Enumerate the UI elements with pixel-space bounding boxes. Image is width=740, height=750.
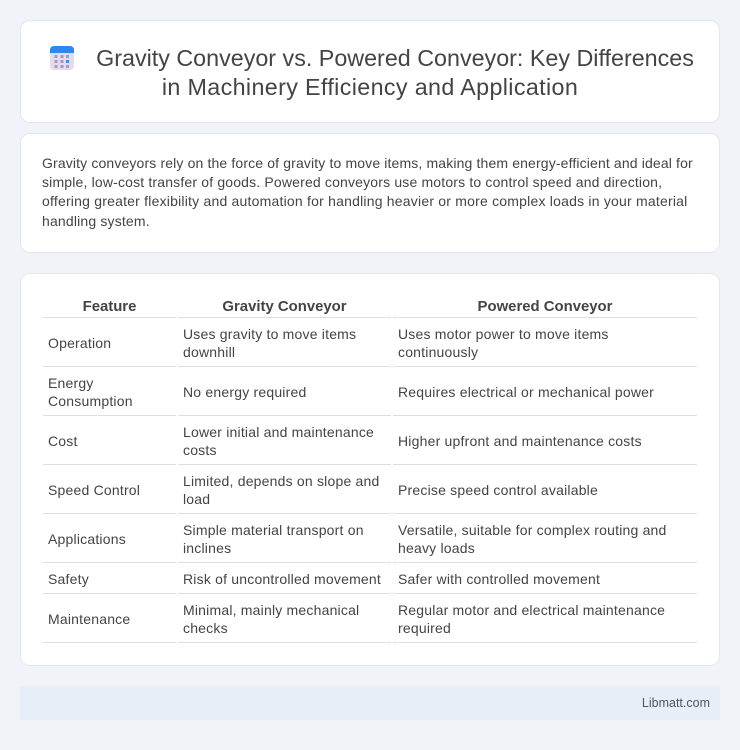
table rows: No energy required [183, 384, 306, 400]
panel: title card [20, 20, 720, 123]
table header: Feature [83, 299, 136, 315]
table rows: Applications [48, 531, 126, 547]
intro text: simple, low-cost transfer of goods. Powered conveyors use motors to control speed and direction, [42, 174, 662, 190]
table rows: Safety [48, 571, 89, 587]
table rows: Lower initial and maintenance [183, 424, 374, 440]
table rows: Minimal, mainly mechanical [183, 602, 359, 618]
table rows: Versatile, suitable for complex routing and [398, 522, 667, 538]
table rows: downhill [183, 344, 235, 360]
table header: Powered Conveyor [478, 299, 612, 315]
title: in Machinery Efficiency and Application [162, 74, 578, 100]
footer [20, 686, 720, 720]
table rows: Cost [48, 433, 78, 449]
intro text: Gravity conveyors rely on the force of gravity to move items, making them energy-efficient and ideal for [42, 155, 693, 171]
comparison table [43, 299, 697, 643]
footer: Libmatt.com [642, 696, 710, 710]
table rows: Uses gravity to move items [183, 326, 356, 342]
icon: calendar [50, 46, 74, 70]
table rows: heavy loads [398, 540, 475, 556]
table rows: Precise speed control available [398, 482, 598, 498]
table rows: Safer with controlled movement [398, 571, 600, 587]
table rows: Operation [48, 335, 111, 351]
panel: comparison table card [20, 273, 720, 666]
table header: Gravity Conveyor [222, 299, 347, 315]
table rows: Limited, depends on slope and [183, 473, 380, 489]
intro text [42, 155, 693, 229]
table rows: Maintenance [48, 611, 130, 627]
table rows: load [183, 491, 210, 507]
table rows: Regular motor and electrical maintenance [398, 602, 665, 618]
table rows: continuously [398, 344, 478, 360]
table rows: Consumption [48, 393, 133, 409]
intro text: handling system. [42, 213, 150, 229]
title [96, 45, 694, 100]
table rows: Speed Control [48, 482, 140, 498]
table rows: required [398, 620, 451, 636]
table rows: inclines [183, 540, 231, 556]
table rows: Simple material transport on [183, 522, 364, 538]
table header [43, 299, 697, 318]
intro text: offering greater flexibility and automation for handling heavier or more complex loads in your material [42, 193, 687, 209]
table rows: Risk of uncontrolled movement [183, 571, 381, 587]
table rows: Energy [48, 375, 94, 391]
panel: intro card [20, 133, 720, 253]
table rows: costs [183, 442, 217, 458]
title: Gravity Conveyor vs. Powered Conveyor: Key Differences [96, 45, 694, 71]
table rows: checks [183, 620, 228, 636]
table rows: Higher upfront and maintenance costs [398, 433, 642, 449]
table rows: Requires electrical or mechanical power [398, 384, 654, 400]
table rows: Uses motor power to move items [398, 326, 609, 342]
